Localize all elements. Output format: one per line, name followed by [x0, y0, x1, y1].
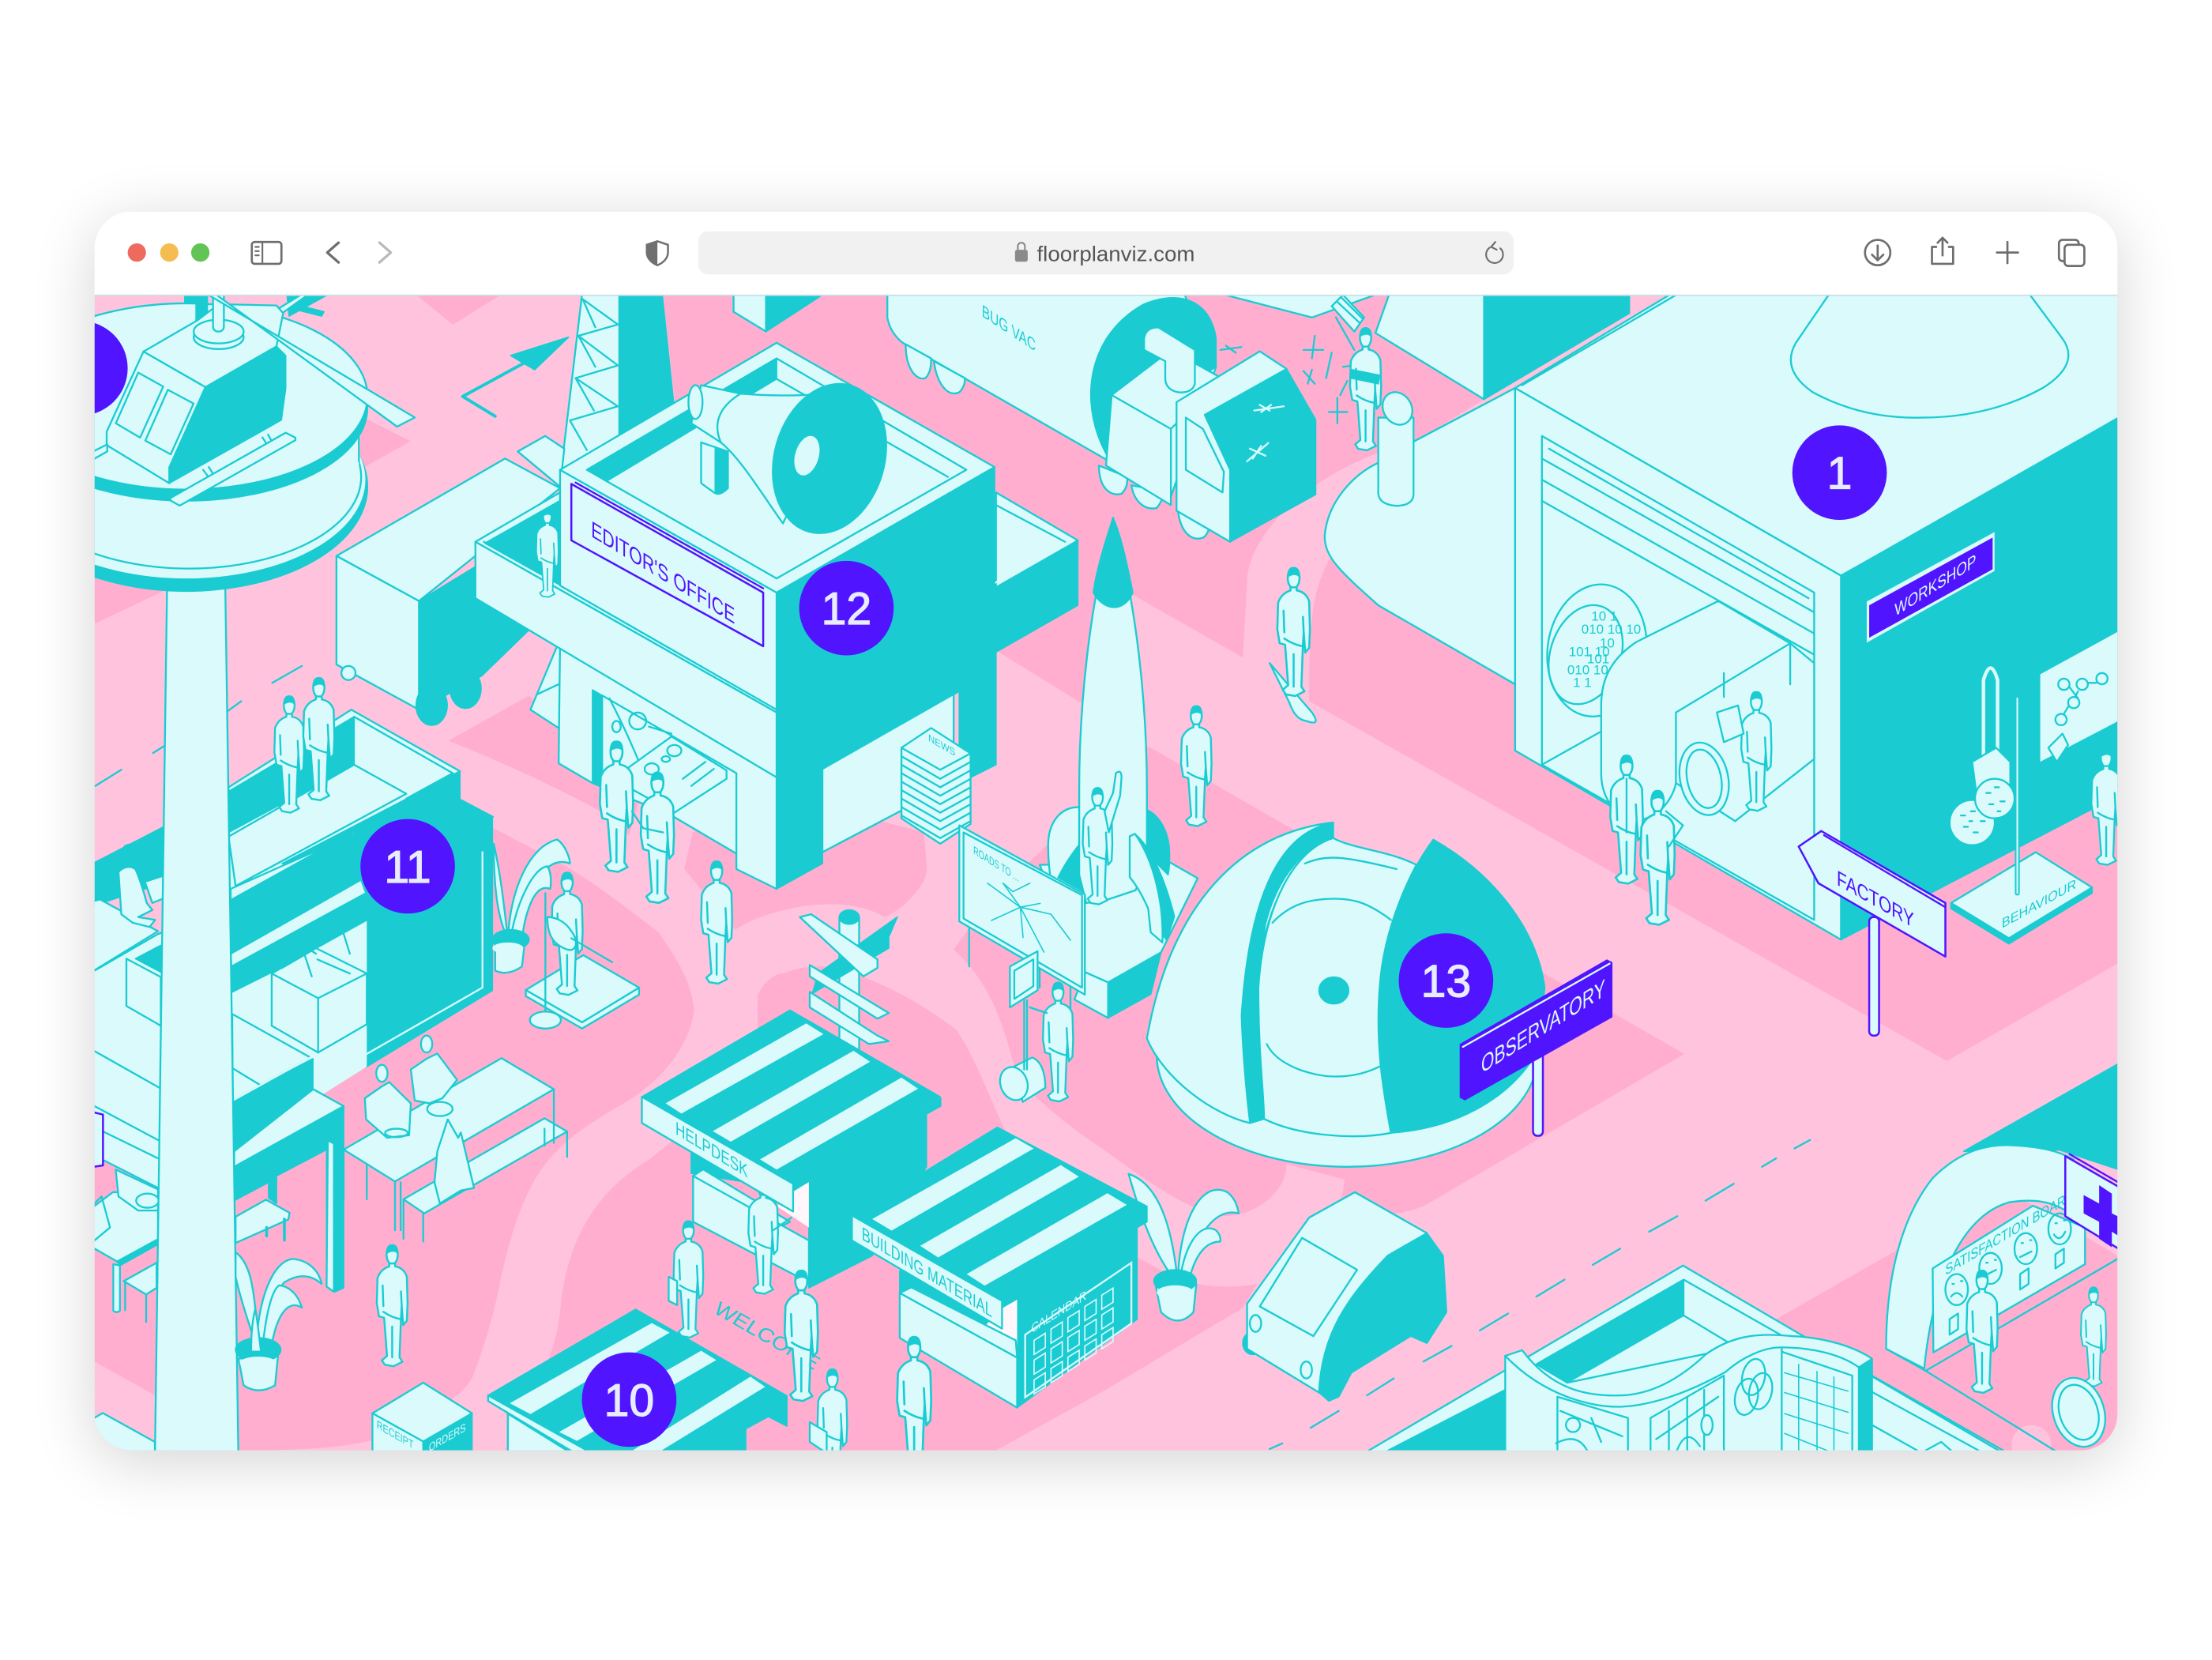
guitarist [551, 872, 583, 995]
helpdesk kiosk [641, 1011, 941, 1293]
stage [526, 988, 639, 1029]
dragonflies [1247, 405, 1284, 461]
people shaking hands [600, 741, 674, 903]
behaviour stand [1951, 698, 2092, 944]
newspaper stack [901, 728, 971, 844]
hanging trays [271, 920, 367, 977]
isometric city map [0, 289, 2124, 1485]
cabin windows [116, 373, 164, 438]
walking man left [377, 1245, 408, 1366]
main blade [199, 289, 415, 427]
marker 10 [582, 1353, 676, 1447]
calendar board [1025, 1263, 1131, 1397]
wing desk [85, 899, 158, 977]
marker 12: 12 [822, 584, 871, 634]
behaviour stand: BEHAVIOUR [2002, 876, 2076, 932]
workshop sign: WORKSHOP [1894, 550, 1976, 620]
calendar board: CALENDAR [1031, 1288, 1086, 1336]
toolbar divider [95, 295, 2117, 296]
satisfaction arch [1887, 1061, 2124, 1454]
receipt and orders box: ORDERS [429, 1421, 465, 1455]
balcony front [476, 542, 777, 777]
observatory base [1157, 944, 1537, 1167]
bottom-left corner block [85, 1413, 155, 1459]
icon: forward chevron [379, 243, 391, 262]
workshop sign [1866, 530, 1996, 644]
browser window shadow [95, 223, 2117, 1462]
wave panel [1505, 1334, 1872, 1459]
marker 13: 13 [1421, 957, 1471, 1007]
icon: privacy shield [647, 241, 668, 265]
building 11 [228, 710, 493, 1292]
pavilion teal corner [1382, 1390, 1505, 1453]
potted plant: centre [1129, 1174, 1239, 1320]
tower lower drum [0, 381, 367, 591]
bug vac truck [887, 289, 1366, 542]
potted plant: guitarist [492, 839, 570, 973]
building 11 room [231, 920, 367, 1101]
megaphone handle [702, 442, 728, 494]
dome left panel [1147, 822, 1334, 1123]
editor's office sign [571, 483, 763, 646]
building 11 roof terrace [228, 710, 460, 903]
truck wheels [905, 344, 1209, 539]
megaphone mouth [755, 370, 904, 547]
wing purple sign [85, 1110, 103, 1169]
hospital sign [2065, 1154, 2124, 1252]
standing man [701, 861, 732, 984]
floor arrow [463, 337, 569, 416]
roof rim [560, 343, 995, 593]
megaphone cap [688, 385, 702, 419]
helpdesk teal body [691, 1098, 941, 1288]
delivery van behind office [337, 436, 564, 725]
marker 1: 1 [1827, 449, 1852, 499]
rocket left fin [1048, 807, 1083, 903]
small bench [235, 1199, 290, 1243]
binary data disc: 1 1 [1573, 676, 1592, 691]
marker 13 [1399, 933, 1493, 1028]
terrace teal rim [282, 771, 460, 882]
skateboarder [1270, 568, 1316, 723]
editor's office sign: EDITOR'S OFFICE [591, 517, 735, 630]
worker at machine [1717, 692, 1771, 811]
wing light floor [85, 932, 167, 1192]
binary data disc: 10 [1600, 636, 1615, 651]
people at workshop [1610, 755, 1683, 924]
editor's office building [476, 343, 1078, 889]
panel board: chart [1650, 1376, 1724, 1453]
road markings: centre dashes [1270, 1140, 1810, 1449]
roads map sign: ROADS TO ... [973, 844, 1019, 885]
left wing behind tower [85, 826, 167, 1192]
top block teal [777, 467, 995, 710]
observatory sign [1460, 959, 1612, 1101]
workshop door opening [1542, 436, 1814, 920]
observatory sign post [1533, 1051, 1543, 1135]
observatory [1147, 822, 1612, 1167]
exhibition pavilion [1364, 1266, 2003, 1459]
factory sign: FACTORY [1837, 866, 1914, 933]
truck exhaust pipe [1144, 327, 1194, 393]
material white gap [984, 1300, 1018, 1346]
rocket platform [1040, 862, 1198, 982]
kiosk queue people [668, 1221, 931, 1485]
marker 1 [1793, 425, 1887, 520]
top block [732, 295, 822, 333]
marker 12 [799, 561, 893, 655]
helpdesk white gap [777, 1182, 809, 1228]
lower level frame [232, 1014, 310, 1101]
icon: reload [1486, 242, 1503, 263]
lab tube and flasks [1950, 668, 2068, 845]
wing back ledge [145, 875, 167, 903]
rear blade [279, 292, 327, 316]
venn diagram [1732, 1357, 1775, 1417]
browser toolbar background [95, 212, 2117, 296]
cafe table with people [344, 1036, 567, 1241]
truck engine box [1106, 350, 1221, 505]
dome centre dot [1319, 977, 1349, 1004]
person on bench [427, 1102, 474, 1203]
dome left teal strip [1241, 822, 1334, 1123]
workshop building [1325, 289, 2124, 939]
rocket right teal fin [1147, 810, 1169, 875]
rocket body [1079, 518, 1147, 903]
helpdesk worker [748, 1177, 792, 1293]
newspaper stack: NEWS [928, 732, 955, 758]
address text: floorplanviz.com [1037, 242, 1195, 265]
binary data disc [1537, 578, 1655, 723]
icon: tabs [2059, 240, 2084, 266]
wing box [126, 958, 161, 1026]
seated man two [411, 1036, 457, 1103]
helicopter [85, 289, 415, 506]
icon: share [1932, 238, 1953, 264]
woman at board [1966, 1270, 1998, 1393]
workshop front wall [1515, 388, 1841, 939]
tail stub [85, 444, 107, 465]
workshop teal side [1841, 415, 2124, 939]
material teal body [900, 1206, 1147, 1408]
marker 10: 10 [604, 1376, 654, 1426]
kiosk 10 [488, 1309, 787, 1456]
board title: SATISFACTION BOARD [1945, 1186, 2074, 1278]
seated person [118, 845, 155, 927]
mic stand [544, 893, 546, 1018]
rocket [1040, 518, 1198, 1018]
board faces [1945, 1214, 2071, 1334]
roads map sign [959, 826, 1085, 1024]
binary data disc: 010 10 [1567, 663, 1608, 678]
floor text: welcome: WELCOME [709, 1298, 824, 1374]
truck cab [1176, 352, 1287, 542]
observatory sign: OBSERVATORY [1481, 975, 1605, 1079]
top block left wall [560, 470, 777, 710]
wing teal top [85, 826, 167, 910]
balcony right inside [996, 492, 1078, 593]
marker 11: 11 [384, 842, 431, 893]
helpdesk desk [693, 1169, 809, 1282]
signpost [799, 910, 897, 1051]
rocket front fin [1130, 834, 1175, 943]
arch teal rear [1964, 1061, 2124, 1171]
traffic lights [128, 243, 209, 262]
person at board [2091, 748, 2121, 865]
browser window [0, 212, 2124, 1485]
receipt and orders box [372, 1383, 472, 1460]
icon: download [1865, 240, 1890, 265]
lower block walls [559, 642, 777, 889]
cabin roof [144, 304, 283, 387]
megaphone inner ring [789, 432, 825, 480]
factory sign [1799, 831, 1945, 1036]
ground: darker pink zones [95, 295, 2117, 1465]
address bar [698, 231, 1514, 274]
seated man one [365, 1065, 411, 1138]
tower stem [155, 578, 239, 1459]
helpdesk awning [641, 1011, 940, 1211]
balcony person [536, 510, 559, 597]
icon: back chevron [327, 243, 339, 262]
binary data disc: 10 1 [1591, 609, 1617, 624]
road markings: left dashes [96, 666, 302, 786]
material awning [852, 1127, 1147, 1329]
pavilion floor [1364, 1266, 2003, 1453]
icon: new tab plus [1997, 242, 2018, 263]
satisfaction board [1932, 1206, 2085, 1353]
rotor hub [194, 289, 243, 349]
interior exhibit table [609, 698, 727, 813]
grid board [1781, 1347, 1853, 1453]
workshop floor [1325, 388, 1515, 684]
pavilion end cap [1859, 1359, 1872, 1459]
small post sign and cylinder with person [995, 951, 1073, 1104]
marker 11 [360, 819, 455, 913]
truck arch [1091, 298, 1216, 458]
walking man [1181, 706, 1212, 826]
panel board: people [1556, 1397, 1628, 1453]
truck tank [887, 289, 1216, 497]
material label: BUILDING MATERIAL [862, 1222, 992, 1322]
autonomous bus [1243, 1192, 1446, 1401]
person at wheel [2044, 1287, 2114, 1454]
cabin front [107, 352, 205, 484]
guitarist on stage [526, 872, 639, 1029]
dome interior [1258, 838, 1416, 1136]
skid struts [203, 435, 275, 481]
helpdesk label: HELPDESK [675, 1117, 748, 1182]
balcony left inner [485, 497, 560, 607]
roof well [587, 359, 966, 578]
potted plant: left [235, 1252, 322, 1391]
room crate [272, 948, 367, 1052]
ground: light pink base [95, 295, 2117, 1451]
roof people on building 11 [274, 678, 334, 813]
roof funnel [1791, 289, 2068, 418]
pavilion right rails [1872, 1376, 2003, 1451]
cylinder bin [1377, 386, 1418, 506]
binary data disc: 101 10 [1569, 644, 1610, 659]
bench [404, 1118, 567, 1214]
wing teal corner [135, 945, 161, 972]
marker partially off screen [33, 321, 128, 416]
building 11 upper band [230, 800, 493, 966]
megaphone [688, 370, 904, 547]
guitar [547, 917, 576, 950]
rotor mast [185, 289, 208, 322]
hopper and ground block [1203, 289, 1629, 399]
wall whiteboard with molecule [2039, 628, 2124, 763]
megaphone horn [691, 385, 845, 523]
lower left table with people [85, 1169, 159, 1322]
icon: lock [1015, 243, 1028, 262]
table top [344, 1058, 554, 1181]
icon: sidebar [252, 242, 281, 264]
truck label: BUG VAC [982, 301, 1036, 356]
roof of workshop [1515, 289, 2124, 576]
binary data disc: 101 [1587, 651, 1609, 666]
lattice tower [530, 289, 675, 728]
material desk [900, 1287, 1018, 1408]
arch wall [1887, 1145, 2074, 1368]
workshop machine tube [1601, 601, 1814, 821]
cabin teal [169, 346, 286, 484]
building material kiosk [852, 1127, 1147, 1408]
person spraying bugs [1336, 318, 1381, 450]
rocket nose [1093, 518, 1133, 608]
receipt and orders box: RECEIPT [377, 1418, 414, 1452]
skid [171, 433, 295, 506]
machine ring [1673, 738, 1735, 819]
balcony teal face [777, 540, 1078, 777]
dome teal panel [1379, 839, 1544, 1133]
binary data disc: 010 10 10 [1582, 622, 1641, 637]
person at rocket [1083, 772, 1122, 905]
tower upper disc [5, 303, 367, 501]
